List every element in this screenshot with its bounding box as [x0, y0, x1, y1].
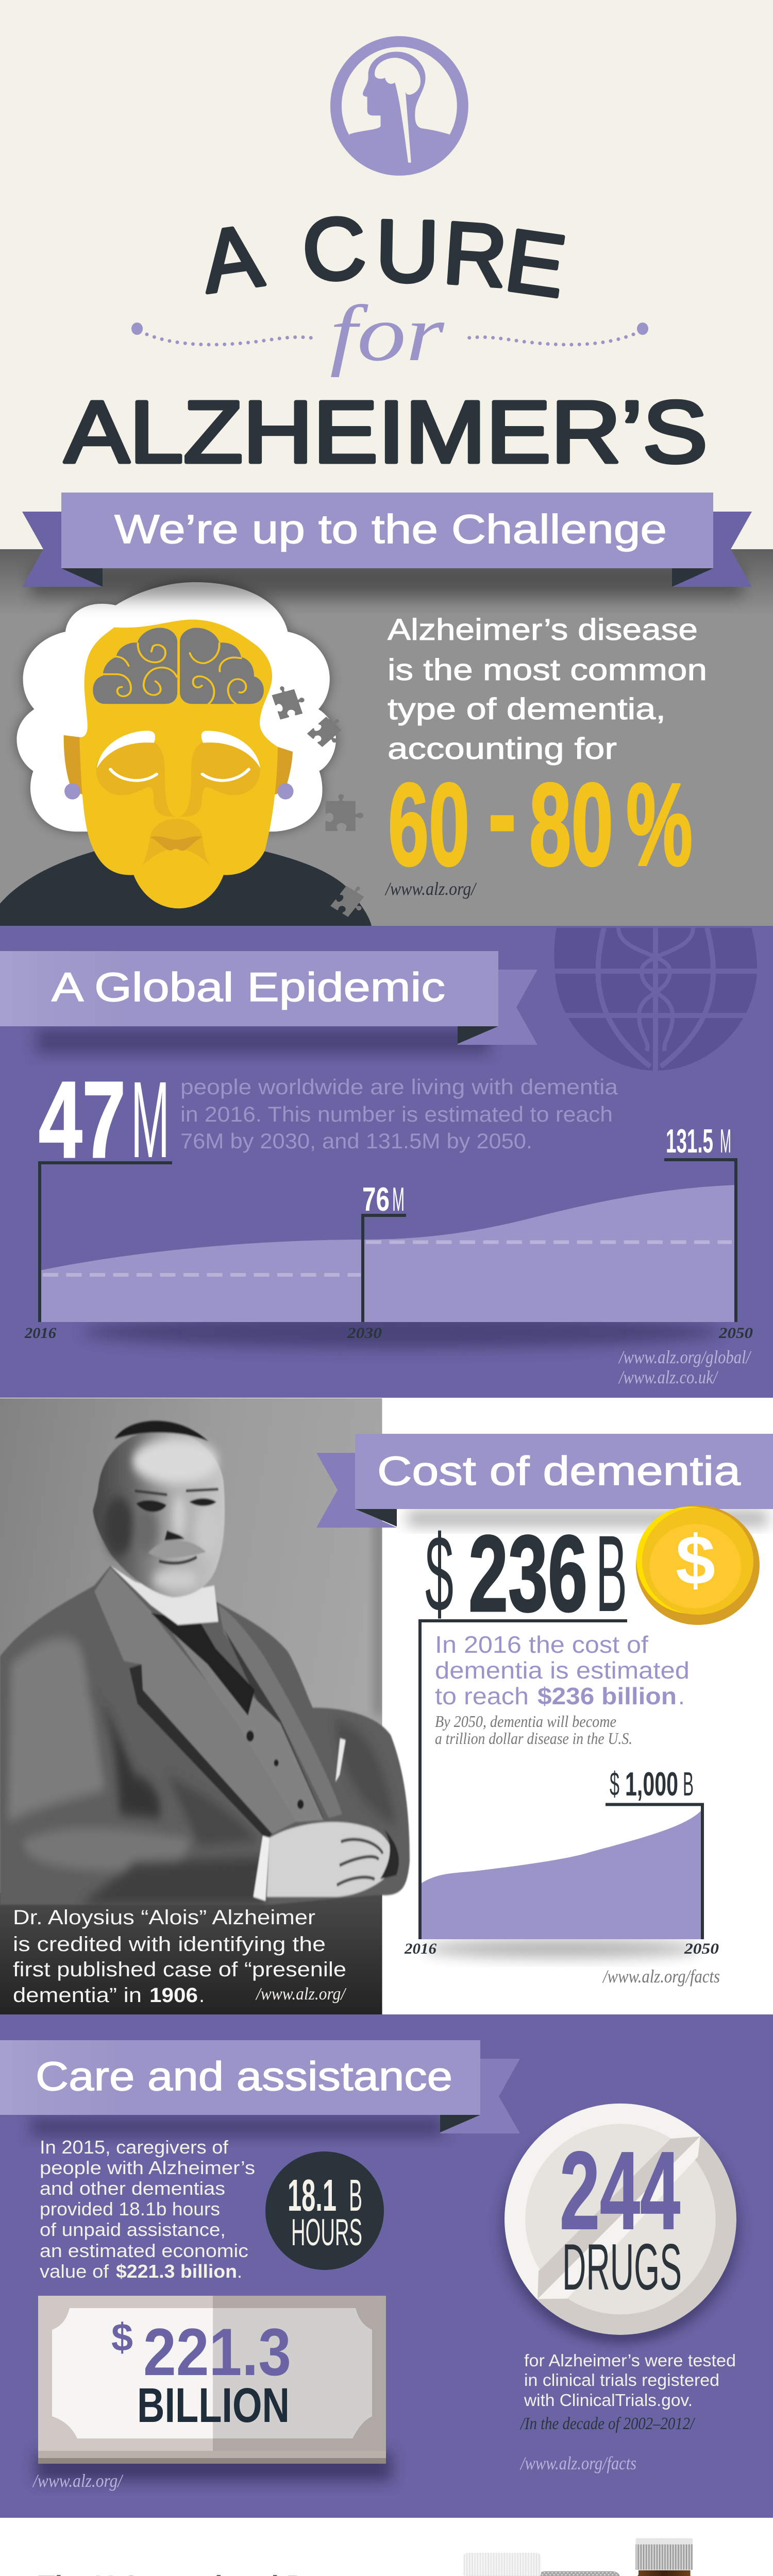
icon: gold dollar coin	[636, 1505, 760, 1625]
white bottle	[458, 2553, 547, 2576]
text: caregivers description: provided 18.1b hours	[40, 2198, 220, 2219]
illustration: medicine bottles and blister packs	[401, 2538, 703, 2576]
text: cost description: In 2016 the cost of	[435, 1631, 648, 1658]
callout: 18.1B hours: HOURS	[291, 2212, 362, 2253]
illustration: dollar bill $221.3 billion	[36, 2296, 392, 2481]
text: trillion dollar note	[435, 1712, 632, 1748]
banner text: A Global Epidemic	[52, 964, 445, 1010]
decorative dotted flourish right	[462, 323, 648, 345]
source: alz.org: /www.alz.org/	[384, 878, 477, 899]
buttons	[246, 1731, 304, 1809]
big stat: 60-80%: %	[626, 759, 693, 890]
stat: $236B: 236	[468, 1513, 587, 1634]
text: intro statement: accounting for	[388, 732, 617, 766]
brown bottle	[626, 2538, 703, 2576]
decorative dotted flourish left	[131, 323, 318, 345]
source: alz.org/facts: /www.alz.org/facts	[602, 1966, 720, 1987]
text: caregivers description: .	[237, 2261, 242, 2282]
panel: title header background	[0, 0, 773, 549]
year axis labels: 2050	[684, 1940, 719, 1957]
chart: cost growth area chart: B	[683, 1765, 694, 1803]
eyes and nose shadows	[136, 1498, 216, 1540]
title: for: for	[330, 289, 445, 378]
chart: dementia growth area chart	[24, 1122, 753, 1348]
caption: Dr. Alzheimer: dementia” in	[13, 1984, 142, 2007]
callout: 18.1B hours: 18.1	[288, 2171, 337, 2221]
callout: 18.1B hours: B	[349, 2171, 362, 2221]
tie	[151, 1613, 255, 1716]
hair shadow	[16, 582, 336, 832]
sources: global epidemic	[618, 1347, 752, 1387]
text: epidemic description: in 2016. This number is estimated to reach	[180, 1102, 613, 1126]
sources: global epidemic: /www.alz.co.uk/	[618, 1367, 719, 1387]
eyebrow ridge	[135, 1489, 219, 1495]
text: caregivers description: In 2015, caregivers of	[40, 2137, 229, 2158]
moustache	[148, 1540, 206, 1557]
caption: Dr. Alzheimer: is credited with identifying the	[13, 1933, 326, 1956]
year axis labels: 2050	[718, 1325, 753, 1342]
dashed reference lines	[43, 1242, 732, 1275]
pocket square	[335, 1738, 345, 1782]
sources: global epidemic: /www.alz.org/global/	[618, 1347, 752, 1367]
text: intro statement: is the most common	[388, 653, 707, 687]
callout: 18.1B hours	[265, 2151, 384, 2270]
caption: Dr. Alzheimer: 1906	[149, 1984, 198, 2007]
panel: grey intro background	[0, 549, 773, 926]
brackets	[420, 1621, 702, 1939]
stat: 244 drugs	[560, 2128, 682, 2303]
ears	[64, 735, 293, 794]
text: caregivers description: $221.3 billion	[116, 2261, 237, 2282]
text: cost description: dementia is estimated	[435, 1657, 690, 1684]
text: clinical trials description: in clinical trials registered	[524, 2370, 719, 2389]
text: intro statement: type of dementia,	[388, 692, 666, 726]
illustration: 244 drugs pill	[493, 2104, 740, 2344]
label: 131.5M: 131.5	[666, 1122, 713, 1160]
lapel right	[219, 1605, 342, 1818]
chart: cost growth area chart	[404, 1621, 719, 1958]
text: caregivers description	[40, 2137, 255, 2282]
hair top	[114, 1421, 209, 1442]
label: 76M: 76	[362, 1180, 390, 1218]
text: clinical trials description: with ClinicalTrials.gov.	[524, 2391, 693, 2410]
year axis labels	[24, 1325, 753, 1342]
panel: global epidemic background	[0, 926, 773, 1398]
label: $1,000B	[610, 1765, 694, 1803]
text: epidemic description	[180, 1075, 618, 1153]
illustration: dollar bill $221.3 billion: BILLION	[137, 2378, 290, 2433]
back blister pack	[537, 2571, 620, 2576]
stat: $236B: $	[425, 1513, 453, 1634]
panel: care and assistance background	[0, 2014, 773, 2518]
face	[79, 620, 278, 908]
photo: Dr. Alois Alzheimer portrait	[0, 1398, 410, 2014]
lips	[150, 836, 203, 851]
text: cost description: $236 billion	[537, 1683, 677, 1709]
title: ALZHEIMER'S: ALZHEIMER’S	[64, 383, 708, 481]
year axis labels	[404, 1940, 719, 1957]
caption: Dr. Alzheimer: first published case of “presenile	[13, 1958, 346, 1981]
neck and collar	[110, 1566, 219, 1625]
banner text: Care and assistance	[36, 2053, 452, 2099]
label: $1,000B: $	[610, 1765, 619, 1803]
big stat: 60-80%: -	[488, 748, 516, 879]
text: epidemic description: 76M by 2030, and 131.5M by 2050.	[180, 1129, 532, 1153]
shirt	[0, 851, 372, 927]
closed eyes	[110, 769, 249, 781]
text: caregivers description: an estimated economic	[40, 2240, 248, 2261]
icon: globe with caduceus watermark	[554, 928, 757, 1071]
banner: We're up to the Challenge	[22, 493, 752, 598]
brain folds	[103, 643, 246, 704]
mouth shading	[143, 819, 209, 865]
banner text: Cost of dementia	[377, 1448, 741, 1494]
banner: Cost of dementia	[316, 1434, 773, 1528]
panel: cost of dementia white background	[382, 1398, 773, 2014]
text: caregivers description: of unpaid assistance,	[40, 2219, 226, 2240]
text: clinical trials description: for Alzheimer’s were tested	[524, 2351, 736, 2370]
text: caregivers description: value of	[40, 2261, 109, 2282]
brain	[93, 628, 264, 704]
icon: head and brain logo	[330, 36, 468, 176]
area	[422, 1811, 701, 1939]
text: clinical trials description	[524, 2351, 736, 2410]
brackets	[40, 1160, 736, 1322]
eyebrows	[97, 731, 260, 768]
amount text: $	[111, 2316, 133, 2360]
puzzle pieces	[270, 682, 373, 920]
coat	[0, 1566, 410, 1905]
big stat: 60-80%	[388, 748, 693, 890]
source: alz.org on photo: /www.alz.org/	[255, 1985, 347, 2004]
stat: 244 drugs: 244	[560, 2128, 680, 2252]
panel: FDA white background	[0, 2518, 773, 2576]
text: intro statement: Alzheimer’s disease	[388, 613, 698, 647]
face	[93, 1430, 225, 1597]
hands	[267, 1822, 394, 1897]
shirt cuff	[254, 1836, 270, 1901]
chart: dementia growth area chart: M	[392, 1180, 405, 1218]
source: alz.org under bill: /www.alz.org/	[32, 2470, 124, 2491]
text: intro statement	[388, 613, 707, 766]
lapel shadow	[129, 1664, 272, 1840]
big stat: 60-80%: 60	[388, 759, 469, 890]
icon: gold dollar coin: $	[676, 1521, 715, 1599]
year axis labels: 2016	[404, 1940, 436, 1957]
illustration: woman with brain and puzzle pieces	[0, 582, 373, 927]
text: M	[131, 1059, 170, 1180]
label: $1,000B: 1,000	[625, 1765, 678, 1803]
hair	[16, 582, 336, 832]
earrings	[64, 783, 294, 800]
watch strap	[380, 1829, 399, 1879]
text: epidemic description: people worldwide are living with dementia	[180, 1075, 618, 1099]
caption: Dr. Alzheimer: Dr. Aloysius “Alois” Alzheimer	[13, 1906, 315, 1929]
chart: dementia growth area chart: M	[720, 1122, 731, 1160]
banner: A Global Epidemic	[0, 951, 537, 1054]
text: trillion dollar note: a trillion dollar disease in the U.S.	[435, 1729, 632, 1748]
lapel left	[94, 1568, 299, 1834]
text: caregivers description: people with Alzheimer’s	[40, 2157, 255, 2178]
title: A CURE: A CURE	[196, 199, 572, 316]
illustration: dollar bill $221.3 billion: 221.3	[143, 2314, 291, 2389]
year axis labels: 2016	[24, 1325, 56, 1342]
banner text: We’re up to the Challenge	[114, 506, 667, 552]
stat: 47M: 47	[39, 1059, 126, 1180]
face highlights	[104, 1438, 220, 1590]
text: caregivers description: and other dementias	[40, 2178, 225, 2199]
text: cost description	[435, 1631, 690, 1709]
text: cost description: .	[678, 1683, 685, 1709]
text: B	[596, 1513, 627, 1634]
source: alz.org/facts care: /www.alz.org/facts	[519, 2453, 636, 2473]
waistcoat	[173, 1633, 324, 1822]
year axis labels: 2030	[347, 1325, 382, 1342]
text: trillion dollar note: By 2050, dementia will become	[435, 1712, 616, 1731]
big stat: 60-80%: 80	[529, 759, 613, 890]
eye sockets and nose	[96, 742, 260, 817]
caption: Dr. Alzheimer	[13, 1906, 346, 2007]
coat shading	[8, 1638, 396, 1905]
banner: Care and assistance	[0, 2040, 520, 2137]
area	[40, 1185, 736, 1322]
note: decade: /In the decade of 2002–2012/	[519, 2414, 696, 2433]
caption: Dr. Alzheimer: .	[199, 1984, 205, 2007]
text: cost description: to reach	[435, 1683, 529, 1709]
